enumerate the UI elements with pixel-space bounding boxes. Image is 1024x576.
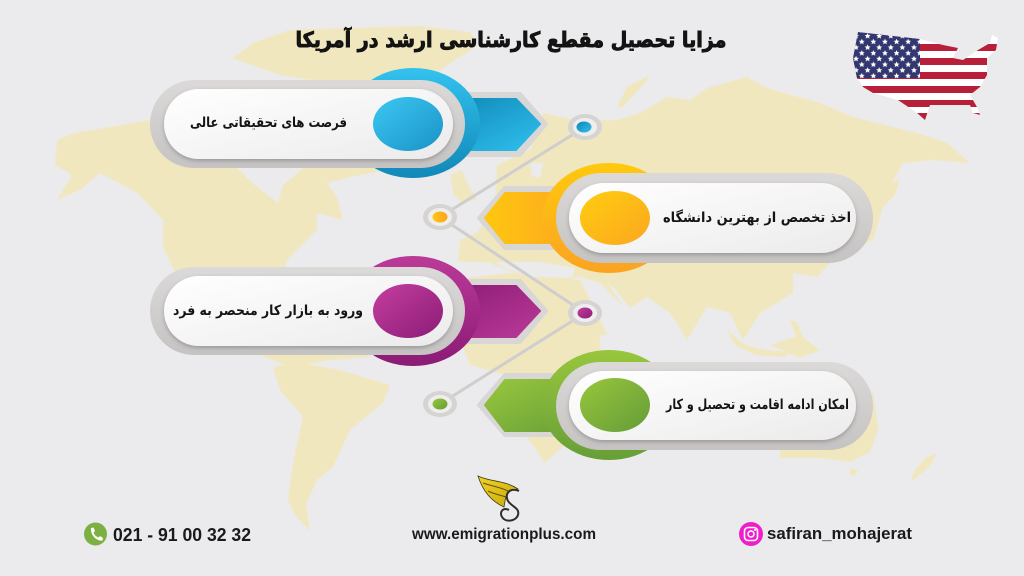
icon: USA flag map: [853, 32, 998, 120]
label: research opportunities: فرصت های تحقیقاتی عالی: [190, 115, 347, 131]
node: yellow: [423, 204, 457, 230]
label: exclusive job market: ورود به بازار کار منحصر به فرد: [173, 303, 363, 319]
node: blue: [568, 114, 602, 140]
icon: magenta circle: [373, 284, 443, 338]
label: best universities: اخذ تخصص از بهترین دانشگاه: [663, 209, 851, 226]
icon: instagram: [739, 522, 763, 546]
icon: phone: [84, 522, 107, 546]
label: residence and work: امکان ادامه اقامت و تحصیل و کار: [665, 397, 849, 413]
icon: green circle: [580, 378, 650, 432]
panel: best universities: [479, 163, 873, 273]
world map: [55, 26, 970, 531]
panel: research opportunities: [150, 68, 546, 178]
connector lines: [440, 127, 585, 404]
panel: residence and work: [479, 350, 873, 460]
phone number: 021 - 91 00 32 32: [113, 525, 251, 545]
instagram handle: safiran_mohajerat: [767, 524, 912, 543]
panel: exclusive job market: [150, 256, 546, 366]
icon: yellow circle: [580, 191, 650, 245]
node: green: [423, 391, 457, 417]
website: www.emigrationplus.com: [411, 526, 596, 543]
node: magenta: [568, 300, 602, 326]
icon: logo: [478, 476, 519, 521]
title: مزایا تحصیل مقطع کارشناسی ارشد در آمریکا: [296, 27, 726, 52]
icon: blue circle: [373, 97, 443, 151]
